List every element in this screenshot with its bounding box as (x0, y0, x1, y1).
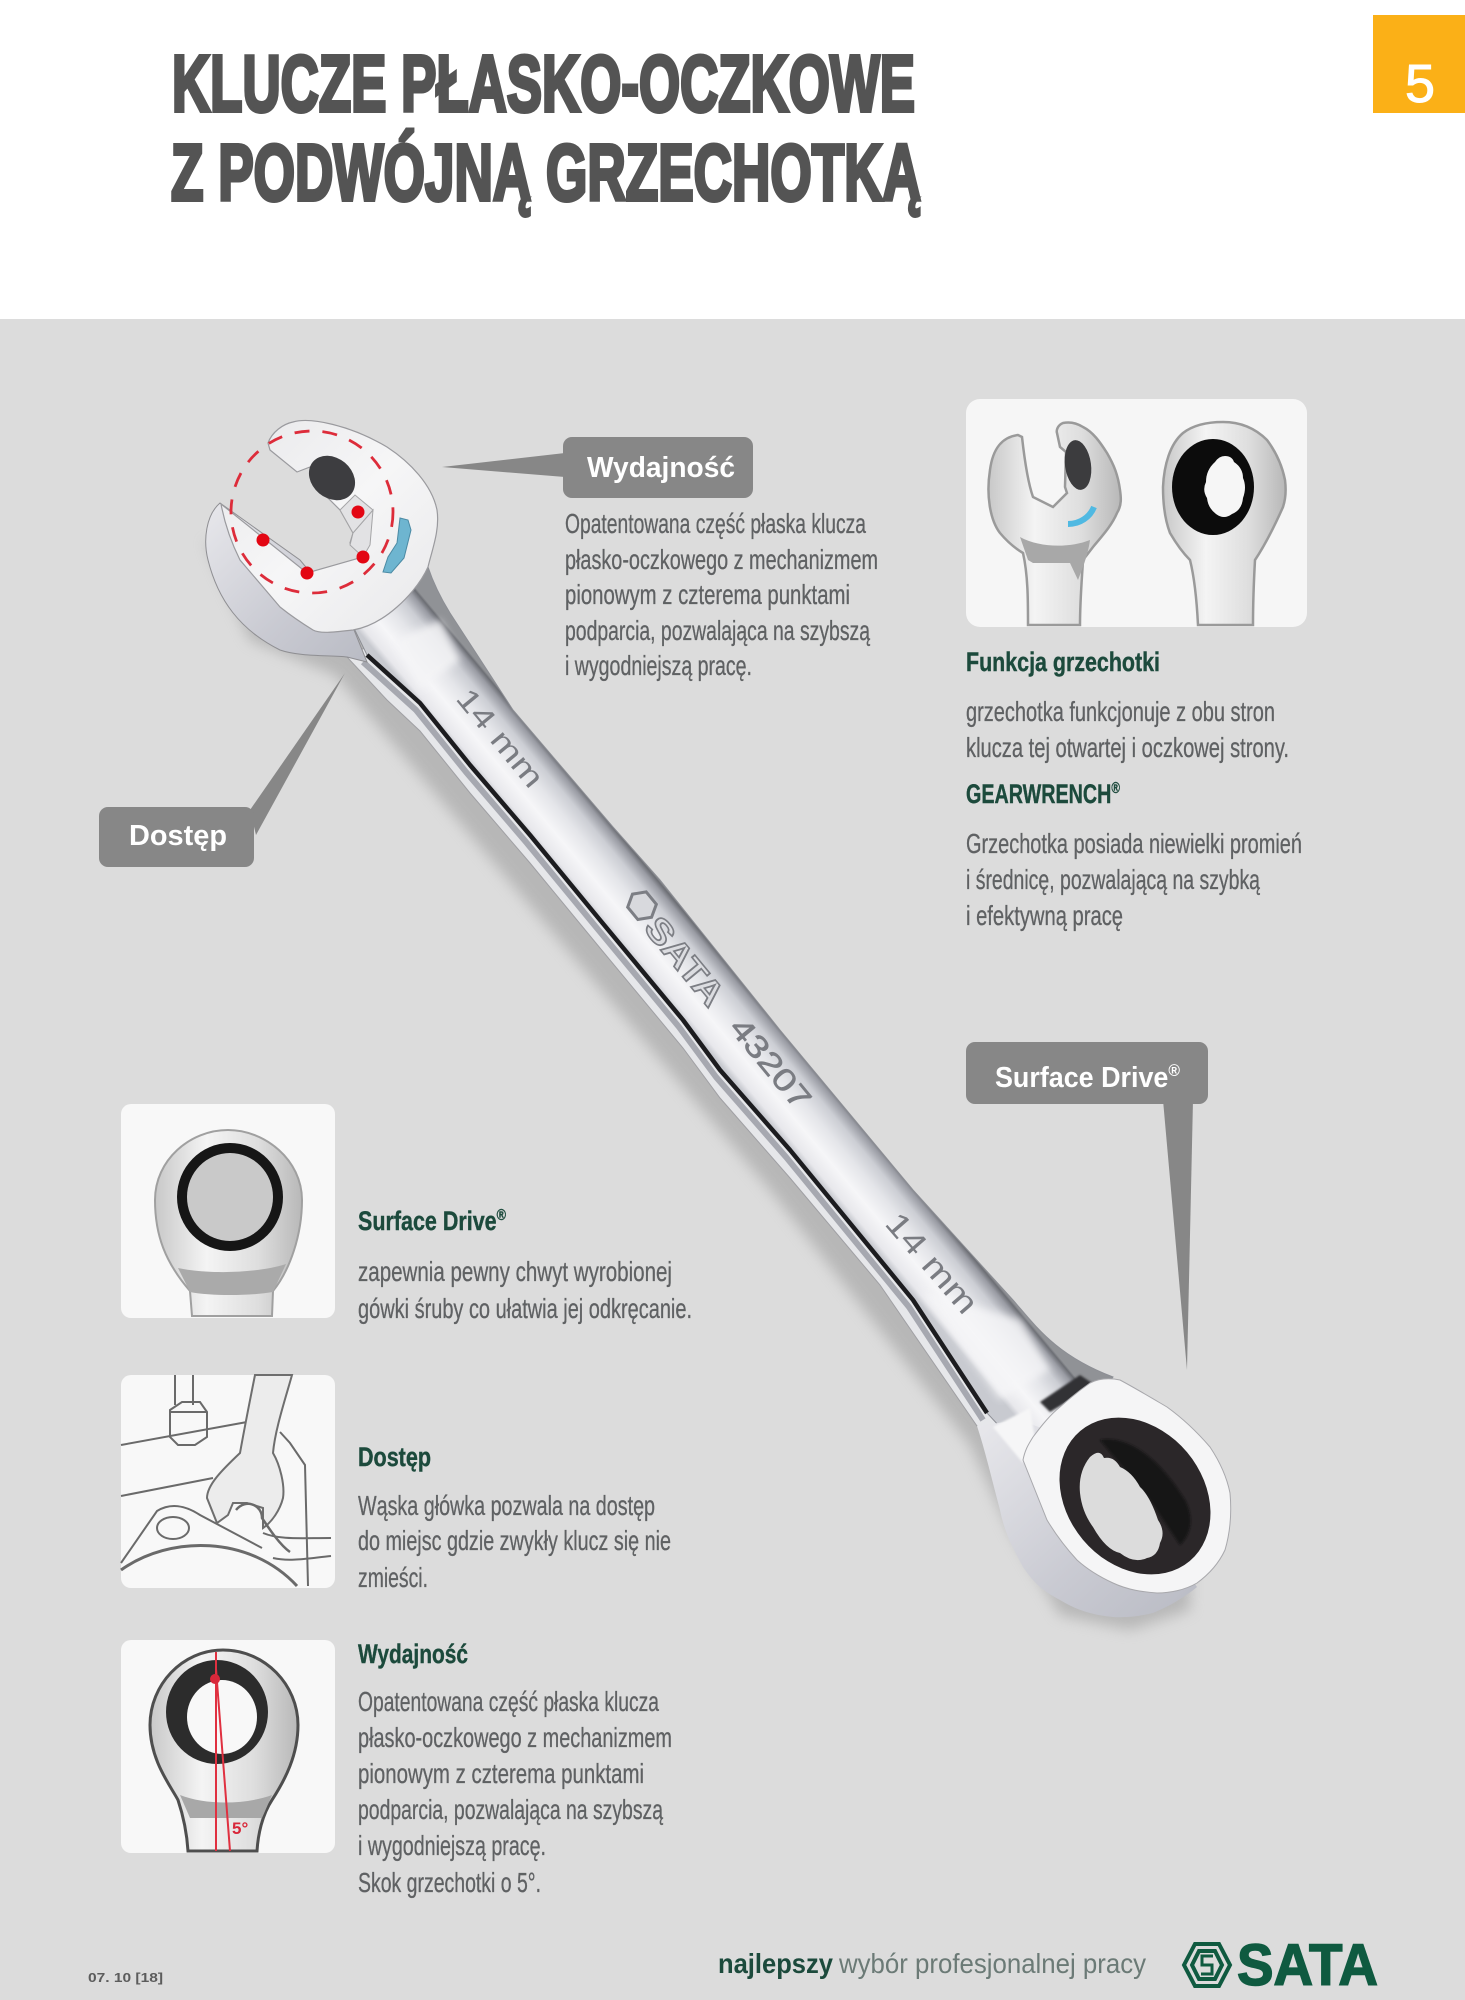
pawl roller (300, 447, 364, 509)
ring opening (1172, 439, 1254, 535)
text: ratchet function: grzechotka funkcjonuje z obu stron (966, 696, 1275, 727)
wrench lower side band (347, 640, 1030, 1440)
ring end drawing (1163, 422, 1286, 625)
text: Wydajność description: i wygodniejszą pracę. (565, 650, 752, 681)
shaft end highlight (920, 1290, 1050, 1400)
neck dark bar (1040, 1375, 1095, 1412)
pawl mechanism (340, 495, 373, 557)
panel: Surface Drive illustration (121, 1104, 335, 1318)
callout: Surface Drive: Surface Drive (995, 1062, 1182, 1094)
text: Wydajność: Wydajność (358, 1639, 468, 1669)
head and neck (155, 1130, 302, 1316)
text: Wydajność description: płasko-oczkowego z mechanizmem (565, 544, 878, 575)
red angle lines (216, 1652, 230, 1851)
etched model number: 43207 (723, 1011, 818, 1116)
footer slogan (718, 1948, 1146, 1979)
neck white patch (993, 1408, 1035, 1463)
open end drawing (988, 422, 1121, 625)
grey band (180, 1795, 272, 1818)
text: Surface Drive: Surface Drive (358, 1206, 532, 1236)
red contact points (256, 506, 370, 580)
shaft groove (367, 655, 987, 1413)
open end lower side (206, 503, 367, 662)
text: Surface Drive: zapewnia pewny chwyt wyrobionej (358, 1256, 672, 1287)
text: Dostęp: zmieści. (358, 1562, 428, 1593)
text: Wydajność: podparcia, pozwalająca na szybszą (358, 1794, 663, 1825)
panel: ratchet function illustration (966, 399, 1307, 627)
text: ratchet function: klucza tej otwartej i oczkowej strony. (966, 732, 1289, 763)
text: Wydajność: pionowym z czterema punktami (358, 1758, 644, 1789)
blue direction arrow (1068, 507, 1094, 524)
text: Dostęp: Wąska główka pozwala na dostęp (358, 1490, 655, 1521)
text: Gearwrench: i efektywną pracę (966, 900, 1123, 931)
shaft neck highlight (395, 620, 460, 690)
text: Gearwrench: i średnicę, pozwalającą na szybką (966, 864, 1260, 895)
text: ratchet function: Funkcja grzechotki (966, 647, 1160, 677)
logo hexagon (1184, 1944, 1230, 1986)
wrench shaft (350, 567, 1113, 1470)
red dashed contact circle (231, 431, 393, 593)
title (171, 39, 921, 217)
wrench shadow (205, 540, 1190, 1630)
head and neck (150, 1650, 298, 1851)
panel: efficiency illustration (121, 1640, 335, 1853)
text: Dostęp: Dostęp (358, 1442, 431, 1472)
text: Wydajność: płasko-oczkowego z mechanizmem (358, 1722, 672, 1753)
text: ratchet function (966, 647, 1289, 763)
etched SATA logo: SATA (636, 909, 732, 1014)
callout: Dostęp: Dostęp (129, 820, 227, 852)
callout: Wydajność (442, 437, 753, 498)
angle label: 5° (232, 1819, 248, 1838)
panel: access illustration (121, 1375, 335, 1588)
open end band (1020, 537, 1090, 580)
SATA logo (1184, 1933, 1378, 1998)
grey band (178, 1264, 286, 1295)
page number badge: 5 (1405, 54, 1435, 114)
socket centre (187, 1153, 273, 1241)
callout: Dostęp (99, 673, 345, 867)
title: KLUCZE PŁASKO-OCZKOWE (172, 39, 915, 128)
text: Wydajność description: pionowym z czterema punktami (565, 579, 850, 610)
ring hole (1204, 456, 1245, 517)
callout: Surface Drive: ® (1168, 1061, 1180, 1080)
wrench drawing (207, 1375, 292, 1528)
ring end lower side (977, 1420, 1197, 1617)
ring (166, 1660, 268, 1764)
ring opening dark wall (1028, 1387, 1242, 1605)
text: Wydajność description: podparcia, pozwalająca na szybszą (565, 615, 870, 646)
blue direction mark (383, 518, 411, 573)
engine block lines (121, 1375, 331, 1586)
text: Wydajność: Skok grzechotki o 5°. (358, 1867, 541, 1898)
groove lower reflection (363, 662, 983, 1420)
text: Surface Drive: gówki śruby co ułatwia jej odkręcanie. (358, 1293, 692, 1324)
hole (187, 1680, 257, 1754)
black ring (177, 1143, 283, 1251)
open end roller (1062, 438, 1094, 492)
etched size label near open end: 14 mm (449, 682, 550, 794)
bolt in jaw (236, 1504, 290, 1552)
ring opening hole (1080, 1453, 1163, 1560)
callout: Surface Drive (966, 1042, 1208, 1370)
ring teeth shading (1100, 1439, 1190, 1545)
footer date code: 07. 10 [18] (88, 1970, 163, 1985)
text: Gearwrench: Grzechotka posiada niewielki promień (966, 828, 1302, 859)
text: Wydajność description: Opatentowana część płaska klucza (565, 508, 866, 539)
open end front face (221, 421, 438, 632)
text: Surface Drive (358, 1206, 692, 1324)
text: Wydajność description (565, 508, 878, 681)
title: Z PODWÓJNĄ GRZECHOTKĄ (171, 128, 921, 217)
red dot (210, 1674, 220, 1684)
footer slogan: najlepszy (718, 1948, 833, 1979)
ring end front face (1023, 1379, 1231, 1593)
etched SATA logo (616, 884, 732, 1014)
text: Dostęp (358, 1442, 671, 1593)
text: Wydajność: i wygodniejszą pracę. (358, 1830, 546, 1861)
text: Wydajność (358, 1639, 672, 1898)
text: Gearwrench: GEARWRENCH (966, 779, 1165, 809)
text: Surface Drive: ® (497, 1207, 506, 1224)
text: Gearwrench: ® (1111, 780, 1120, 797)
callout: Wydajność: Wydajność (587, 452, 735, 484)
text: Gearwrench (966, 779, 1302, 931)
logo wordmark: SATA (1237, 1933, 1378, 1998)
etched size label near ring end: 14 mm (878, 1205, 986, 1321)
wrench illustration (205, 421, 1242, 1630)
text: Wydajność: Opatentowana część płaska klucza (358, 1686, 659, 1717)
page number badge (1373, 15, 1465, 114)
text: Dostęp: do miejsc gdzie zwykły klucz się nie (358, 1525, 671, 1556)
footer slogan: wybór profesjonalnej pracy (838, 1948, 1146, 1979)
